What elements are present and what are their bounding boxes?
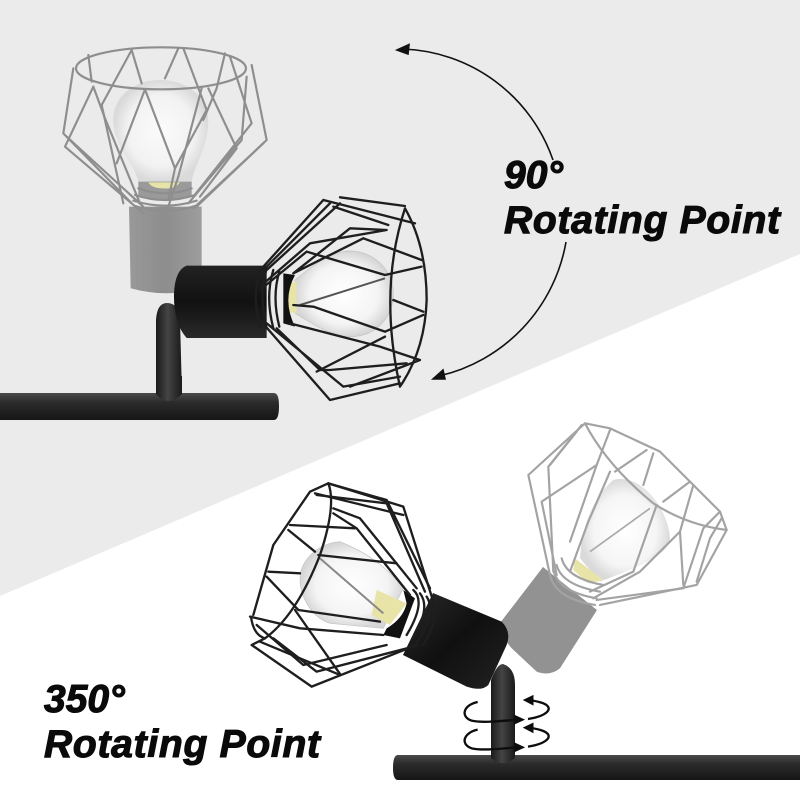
post: upper lamp arm [156,303,182,401]
text: 350 degree label: 350° [44,678,125,721]
grey wire cage [63,47,267,213]
background: grey diagonal panel [0,0,800,596]
arrow: 90 degree lower arc [433,242,566,379]
lamp: black, tilted left [250,483,508,689]
grey wire cage [528,423,727,605]
arrows: 350 degree swivel indicator, lower [465,724,549,751]
text: bottom rotating point: Rotating Point [44,723,322,766]
lamp: grey ghost, upright position [63,47,267,293]
bulb [295,251,393,337]
post: lower lamp arm [491,664,515,763]
lamp base thread [372,590,407,625]
lamp base thread [283,282,297,313]
black wire cage [250,483,434,687]
black wire cage [256,197,427,400]
text: top rotating point: Rotating Point [504,199,782,242]
bar: lower lamp rail [393,755,800,780]
text: 90 degree label: 90° [504,154,563,197]
grey cylinder [500,567,597,674]
arrows: 350 degree swivel indicator, upper [465,697,549,723]
black cylinder [174,266,267,338]
post foot [156,376,182,401]
socket ring [283,273,295,327]
socket and base [138,182,192,200]
bar: upper lamp rail [0,393,279,420]
socket ring [383,590,415,638]
filament [320,558,383,613]
lamp base thread [573,558,603,583]
filament [590,508,650,552]
arrow: 90 degree upper arc [397,44,553,160]
bulb [300,542,403,628]
grey cylinder [129,207,202,293]
bulb [113,80,208,182]
lamp base thread [148,182,180,188]
black cylinder [403,593,508,689]
post foot [491,738,515,763]
lamp: grey ghost, tilted right [500,423,727,674]
filament [300,278,385,305]
bulb [580,479,670,582]
lamp: black, rotated position [174,197,427,400]
